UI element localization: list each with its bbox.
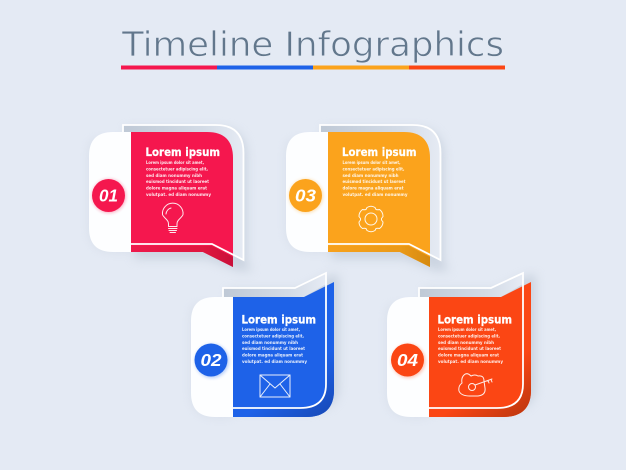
- body text 03: dolore magna aliquam erat: [342, 186, 404, 192]
- body text 01: volutpat. ed diam nonummy: [146, 192, 211, 198]
- body text 04: euismod tincidunt ut laoreet: [438, 346, 502, 352]
- body text 03: [342, 160, 408, 198]
- body text 03: Lorem ipsum dolor sit amet,: [342, 160, 401, 166]
- number badge 03: [289, 179, 323, 213]
- heading 01: Lorem ipsum: [146, 145, 220, 159]
- body text 03: consectetuer adipiscing elit,: [342, 166, 405, 172]
- body text 03: volutpat. ed diam nonummy: [342, 192, 408, 198]
- number badge 02: [194, 344, 229, 378]
- body text 03: sed diam nonummy nibh: [342, 173, 398, 179]
- body text 01: Lorem ipsum dolor sit amet,: [146, 160, 204, 166]
- body text 04: sed diam nonummy nibh: [438, 340, 494, 346]
- body text 03: euismod tincidunt ut laoreet: [342, 179, 406, 185]
- body text 02: consectetuer adipiscing elit,: [242, 333, 304, 339]
- body text 02: [242, 327, 307, 365]
- panel: step 03: [286, 125, 450, 271]
- body text 01: [146, 160, 211, 198]
- body text 04: consectetuer adipiscing elit,: [438, 333, 500, 339]
- icon: gear: [359, 206, 383, 232]
- body text 01: euismod tincidunt ut laoreet: [146, 179, 210, 185]
- body text 04: [438, 327, 503, 365]
- panel: step 02: [191, 273, 339, 417]
- title: Timeline Infographics: [121, 25, 504, 65]
- number badge 04: [391, 344, 426, 378]
- body text 04: Lorem ipsum dolor sit amet,: [438, 327, 496, 333]
- body text 02: euismod tincidunt ut laoreet: [242, 346, 306, 352]
- heading 02: Lorem ipsum: [242, 312, 316, 326]
- body text 04: dolore magna aliquam erat: [438, 353, 500, 359]
- icon: envelope: [260, 375, 290, 397]
- body text 02: dolore magna aliquam erat: [242, 353, 304, 359]
- title underline: [121, 66, 505, 70]
- body text 01: sed diam nonummy nibh: [146, 173, 202, 179]
- body text 02: Lorem ipsum dolor sit amet,: [242, 327, 300, 333]
- icon: cloud with key: [459, 374, 492, 396]
- body text 02: sed diam nonummy nibh: [242, 340, 298, 346]
- number badge 01: [92, 179, 126, 213]
- icon: light bulb: [162, 203, 183, 232]
- body text 04: volutpat. ed diam nonummy: [438, 359, 503, 365]
- body text 02: volutpat. ed diam nonummy: [242, 359, 307, 365]
- number badge 04: 04: [397, 350, 418, 370]
- panel: step 01: [89, 125, 253, 271]
- body text 01: consectetuer adipiscing elit,: [146, 166, 208, 172]
- panel: step 04: [387, 273, 536, 417]
- number badge 03: 03: [295, 186, 316, 206]
- heading 04: Lorem ipsum: [438, 312, 512, 326]
- heading 03: Lorem ipsum: [342, 145, 417, 159]
- number badge 02: 02: [200, 350, 222, 370]
- number badge 01: 01: [99, 186, 118, 206]
- body text 01: dolore magna aliquam erat: [146, 186, 208, 192]
